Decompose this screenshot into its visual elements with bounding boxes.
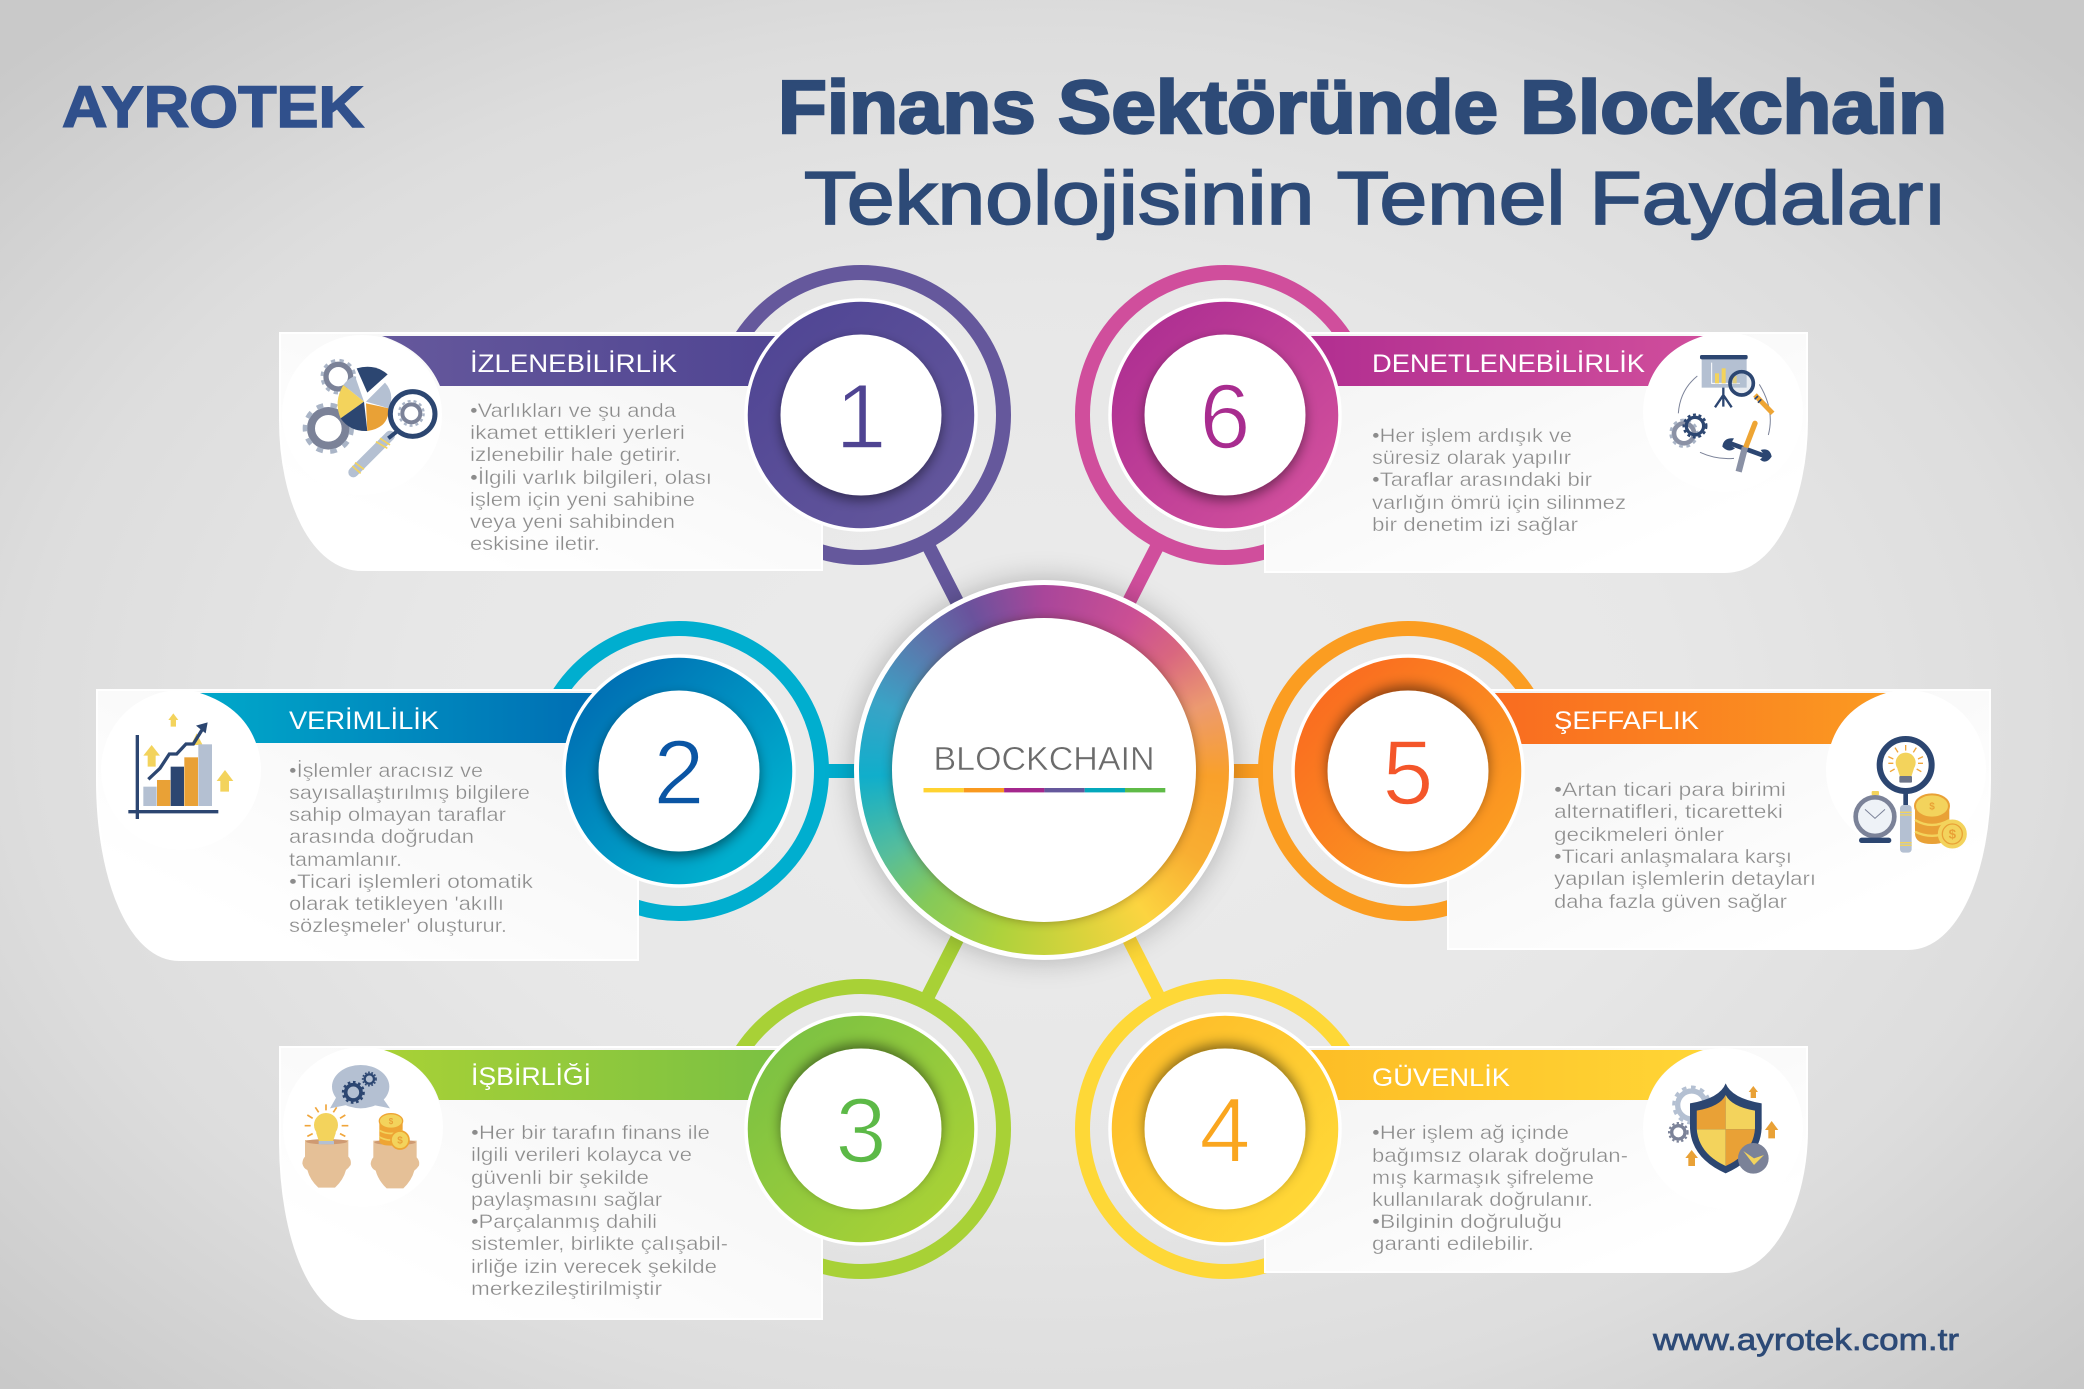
heading: VERİMLİLİK <box>289 706 439 735</box>
number disc 5 <box>1293 656 1523 886</box>
body text <box>470 400 712 555</box>
connector lines to centre hub <box>821 541 1266 1002</box>
number disc 3: 3 <box>835 1080 887 1182</box>
panel: denetlenebilirlik <box>1110 300 1807 572</box>
body text: tamamlanır. <box>289 849 402 871</box>
number disc 6 <box>1110 300 1340 530</box>
body text <box>1372 425 1626 536</box>
heading: ŞEFFAFLIK <box>1554 707 1699 735</box>
body text: sistemler, birlikte çalışabil- <box>471 1233 728 1255</box>
body text: •Ticari işlemleri otomatik <box>289 871 533 893</box>
body text: irliğe izin verecek şekilde <box>471 1256 717 1278</box>
body text: •Parçalanmış dahili <box>471 1211 657 1233</box>
body text: bağımsız olarak doğrulan- <box>1372 1145 1628 1167</box>
number disc 1: 1 <box>835 366 887 468</box>
heading: İŞBİRLİĞİ <box>471 1062 591 1091</box>
icon: presentation, tools and gears <box>1671 355 1773 472</box>
panel: verimlilik <box>97 656 794 960</box>
body text: varlığın ömrü için silinmez <box>1372 492 1626 514</box>
body text: daha fazla güven sağlar <box>1554 891 1788 913</box>
body text: •İşlemler aracısız ve <box>289 759 483 782</box>
number disc 6: 6 <box>1199 366 1251 468</box>
body text: olarak tetikleyen 'akıllı <box>289 893 504 915</box>
body text: sahip olmayan taraflar <box>289 804 507 826</box>
body text: güvenli bir şekilde <box>471 1167 649 1189</box>
icon: rising bar chart <box>128 713 233 819</box>
heading: İZLENEBİLİRLİK <box>470 349 677 378</box>
body text: alternatifleri, ticaretteki <box>1554 801 1783 823</box>
body text: merkezileştirilmiştir <box>471 1278 663 1300</box>
body text: ilgili verileri kolayca ve <box>471 1144 692 1166</box>
heading: GÜVENLİK <box>1372 1063 1510 1092</box>
body text: •Taraflar arasındaki bir <box>1372 469 1593 491</box>
number disc 4 <box>1110 1014 1340 1244</box>
body text: veya yeni sahibinden <box>470 511 675 533</box>
logo: AYROTEK <box>62 75 364 140</box>
icon: two heads sharing ideas: $ <box>397 1136 403 1147</box>
body text: kullanılarak doğrulanır. <box>1372 1189 1593 1211</box>
number disc 5: 5 <box>1382 722 1434 824</box>
outer rings <box>536 272 1550 1272</box>
body text: süresiz olarak yapılır <box>1372 447 1572 469</box>
body text: •Bilginin doğruluğu <box>1372 1211 1562 1233</box>
icon: two heads sharing ideas <box>302 1065 419 1188</box>
body text: gecikmeleri önler <box>1554 824 1725 846</box>
body text: izlenebilir hale getirir. <box>470 444 681 466</box>
body text: paylaşmasını sağlar <box>471 1189 663 1211</box>
body text: garanti edilebilir. <box>1372 1233 1534 1255</box>
body text <box>471 1122 728 1300</box>
body text: •Her bir tarafın finans ile <box>471 1122 710 1144</box>
heading: DENETLENEBİLİRLİK <box>1372 349 1645 378</box>
number disc 4: 4 <box>1199 1080 1251 1182</box>
body text: •Her işlem ağ içinde <box>1372 1122 1569 1144</box>
body text: yapılan işlemlerin detayları <box>1554 868 1816 890</box>
panel: şeffaflık <box>1293 656 1990 949</box>
title: Teknolojisinin Temel Faydaları <box>804 156 1947 240</box>
body text: sözleşmeler' oluşturur. <box>289 915 507 937</box>
website url: www.ayrotek.com.tr <box>1652 1322 1959 1357</box>
number disc 2 <box>564 656 794 886</box>
icon: magnifier, clock and coins <box>1856 739 1966 853</box>
panel: güvenlik <box>1110 1014 1807 1272</box>
body text: arasında doğrudan <box>289 826 474 848</box>
body text: •İlgili varlık bilgileri, olası <box>470 466 712 489</box>
central blockchain hub <box>854 580 1234 960</box>
body text <box>1372 1122 1628 1255</box>
panel: işbirliği <box>280 1014 976 1319</box>
body text: eskisine iletir. <box>470 533 600 555</box>
central blockchain hub: BLOCKCHAIN <box>933 740 1154 777</box>
icon: two heads sharing ideas: $ <box>389 1117 394 1126</box>
body text <box>1554 779 1816 913</box>
body text: bir denetim izi sağlar <box>1372 514 1579 536</box>
icon: security shield <box>1669 1083 1778 1174</box>
body text: •Her işlem ardışık ve <box>1372 425 1572 447</box>
number disc 2: 2 <box>653 722 705 824</box>
body text: işlem için yeni sahibine <box>470 489 695 511</box>
body text: sayısallaştırılmış bilgilere <box>289 782 530 804</box>
title <box>778 65 1947 240</box>
icon: magnifier, clock and coins: $ <box>1949 827 1957 842</box>
icon: gears, pie chart and magnifier <box>305 360 435 473</box>
body text: •Artan ticari para birimi <box>1554 779 1786 801</box>
body text: mış karmaşık şifreleme <box>1372 1167 1594 1189</box>
title: Finans Sektöründe Blockchain <box>778 65 1947 149</box>
body text: ikamet ettikleri yerleri <box>470 422 685 444</box>
body text <box>289 759 533 937</box>
body text: •Ticari anlaşmalara karşı <box>1554 846 1792 868</box>
number disc 3 <box>746 1014 976 1244</box>
icon: magnifier, clock and coins: $ <box>1929 801 1935 812</box>
number disc 1 <box>746 300 976 530</box>
panel: izlenebilirlik <box>280 300 976 570</box>
body text: •Varlıkları ve şu anda <box>470 400 676 422</box>
